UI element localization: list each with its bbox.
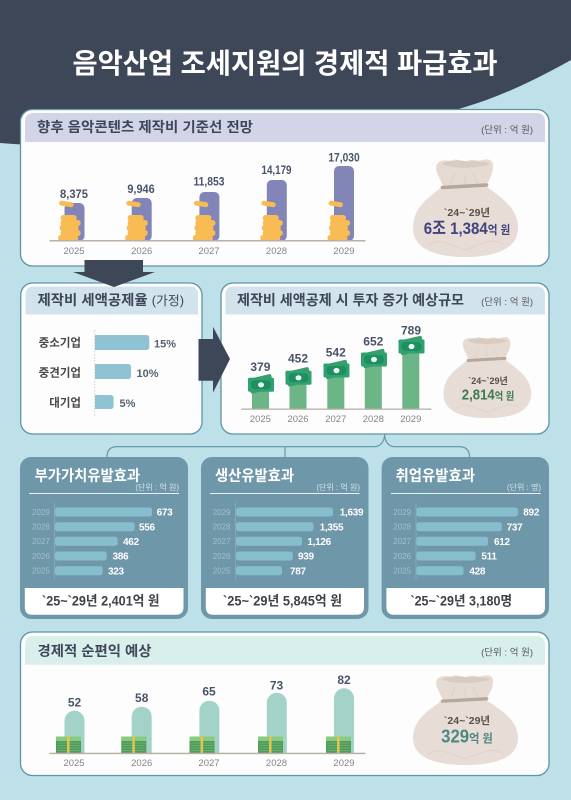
panel heading: 부가가치유발효과 (35, 468, 140, 484)
bar chart: investment: 452 (288, 352, 308, 366)
money bag total: `24~`29년 (444, 206, 490, 219)
bar chart: credit rates: 10% (136, 368, 159, 380)
unit: (단위 : 명) (507, 482, 541, 492)
money bag total (413, 159, 518, 257)
bar chart: production cost: 2026 (131, 246, 152, 257)
bar chart: value added: 2025 (32, 566, 50, 576)
bar chart: credit rates: 5% (120, 398, 136, 410)
panel heading: 경제적 순편익 예상 (38, 643, 152, 659)
panel: employment effect (382, 457, 549, 619)
total box: `25~`29년 3,180명 (410, 594, 512, 608)
panel: production effect (201, 457, 368, 619)
bar chart: net benefit: 2025 (63, 758, 85, 769)
bar chart: net benefit: 82 (337, 673, 351, 687)
bar chart: production (213, 503, 364, 579)
bar chart: production cost: 2029 (333, 246, 355, 257)
bar chart: value added: 386 (112, 552, 129, 563)
unit: (단위 : 억 원) (135, 482, 179, 492)
bar chart: credit rates: 중소기업 (39, 336, 81, 350)
bar chart: credit rates: 15% (154, 338, 176, 350)
panel: value added effect (20, 457, 188, 619)
connector lines (107, 434, 470, 457)
bar chart: production: 939 (298, 552, 315, 563)
dark header shape (0, 0, 571, 147)
bar chart: net benefit: 2029 (333, 758, 355, 769)
bar chart: production: 2026 (213, 552, 231, 561)
total box (206, 588, 364, 615)
bar chart: employment: 2028 (393, 522, 412, 532)
panel heading: 생산유발효과 (215, 468, 294, 484)
bar chart: net benefit (50, 673, 366, 769)
title: 음악산업 조세지원의 경제적 파급효과 (72, 48, 498, 79)
bar chart: net benefit: 52 (68, 696, 81, 710)
bar chart: credit rates (39, 330, 176, 417)
bar chart: investment (241, 324, 431, 425)
bar chart: investment: 2029 (400, 414, 421, 425)
panel: production cost outlook (20, 110, 549, 266)
panel heading: 제작비 세액공제율 (가정) (38, 292, 184, 308)
bar chart: production cost: 9,946 (127, 182, 155, 196)
bar chart: employment: 511 (481, 552, 497, 563)
bar chart: employment: 892 (523, 508, 540, 519)
bar chart: credit rates: 중견기업 (39, 366, 81, 380)
money bag total (413, 675, 518, 765)
panel: tax credit rate (21, 283, 202, 434)
unit: (단위 : 억 원) (481, 646, 533, 658)
bar chart: value added: 323 (108, 566, 125, 577)
money bag total: 6조 1,384억 원 (424, 219, 510, 238)
unit: (단위 : 억 원) (316, 482, 360, 492)
total box (25, 588, 183, 615)
bar chart: value added: 2027 (32, 537, 50, 546)
bar chart: production cost (50, 150, 366, 257)
bar chart: employment: 612 (494, 537, 511, 548)
bar chart: production: 2028 (213, 522, 231, 532)
bar chart: investment: 379 (250, 360, 271, 374)
bar chart: investment: 542 (326, 346, 346, 360)
bar chart: production cost: 11,853 (194, 174, 225, 188)
bar chart: production cost: 14,179 (262, 163, 292, 177)
bar chart: net benefit: 2027 (198, 758, 220, 769)
arrow: right (198, 327, 230, 393)
bar chart: value added: 2026 (32, 552, 50, 561)
bar chart: investment: 2028 (363, 414, 384, 425)
total box: `25~`29년 5,845억 원 (223, 594, 342, 608)
bar chart: employment: 428 (469, 566, 486, 577)
panel: net benefit (20, 632, 549, 776)
bar chart: employment: 737 (507, 522, 523, 533)
bar chart: value added: 462 (123, 537, 140, 548)
bar chart: production: 787 (290, 566, 307, 577)
bar chart: investment: 2026 (287, 414, 309, 425)
panel: investment increase (221, 283, 549, 434)
bar chart: production: 2027 (213, 537, 231, 546)
bar chart: production cost: 2027 (198, 246, 220, 257)
money bag total: `24~`29년 (468, 375, 508, 386)
bar chart: employment: 2029 (393, 508, 412, 517)
total box (386, 588, 545, 615)
panel heading: 제작비 세액공제 시 투자 증가 예상규모 (237, 292, 464, 308)
bar chart: investment: 2025 (250, 414, 271, 425)
bar chart: employment (393, 503, 540, 579)
money bag total: `24~`29년 (444, 714, 490, 727)
bar chart: value added (32, 503, 173, 579)
bar chart: investment: 2027 (325, 414, 346, 425)
bar chart: production: 2029 (213, 508, 231, 517)
money bag total (444, 337, 531, 418)
bar chart: production cost: 2028 (266, 246, 287, 257)
header bar (225, 286, 545, 314)
unit: (단위 : 억 원) (481, 296, 533, 308)
bar chart: production: 1,126 (307, 537, 332, 548)
bar chart: investment: 789 (401, 324, 421, 338)
bar chart: value added: 2029 (32, 508, 50, 517)
header bar (25, 113, 545, 142)
panel heading: 향후 음악콘텐츠 제작비 기준선 전망 (37, 119, 253, 135)
bar chart: production cost: 17,030 (328, 150, 360, 164)
bar chart: net benefit: 65 (202, 684, 216, 698)
bar chart: investment: 652 (363, 334, 384, 348)
bar chart: production cost: 8,375 (60, 187, 88, 201)
bar chart: production: 2025 (213, 566, 231, 576)
bar chart: net benefit: 2026 (131, 758, 152, 769)
bar chart: employment: 2025 (393, 566, 412, 576)
bar chart: value added: 556 (139, 522, 156, 533)
money bag total: 329억 원 (441, 726, 493, 746)
bar chart: credit rates: 대기업 (49, 396, 81, 410)
arrow: down (73, 260, 155, 287)
bar chart: value added: 2028 (32, 522, 50, 532)
bar chart: employment: 2026 (393, 552, 412, 561)
unit: (단위 : 억 원) (481, 124, 533, 136)
money bag total: 2,814억 원 (462, 386, 514, 404)
bar chart: employment: 2027 (393, 537, 412, 546)
bar chart: production: 1,639 (340, 508, 364, 519)
bar chart: production: 1,355 (320, 522, 344, 533)
bar chart: net benefit: 58 (135, 691, 149, 705)
bar chart: net benefit: 2028 (266, 758, 287, 769)
panel heading: 취업유발효과 (396, 468, 475, 484)
total box: `25~`29년 2,401억 원 (42, 594, 160, 608)
bar chart: production cost: 2025 (63, 246, 85, 257)
header bar (25, 636, 545, 665)
bar chart: value added: 673 (157, 508, 173, 519)
header bar (26, 286, 198, 314)
bar chart: net benefit: 73 (270, 678, 283, 692)
